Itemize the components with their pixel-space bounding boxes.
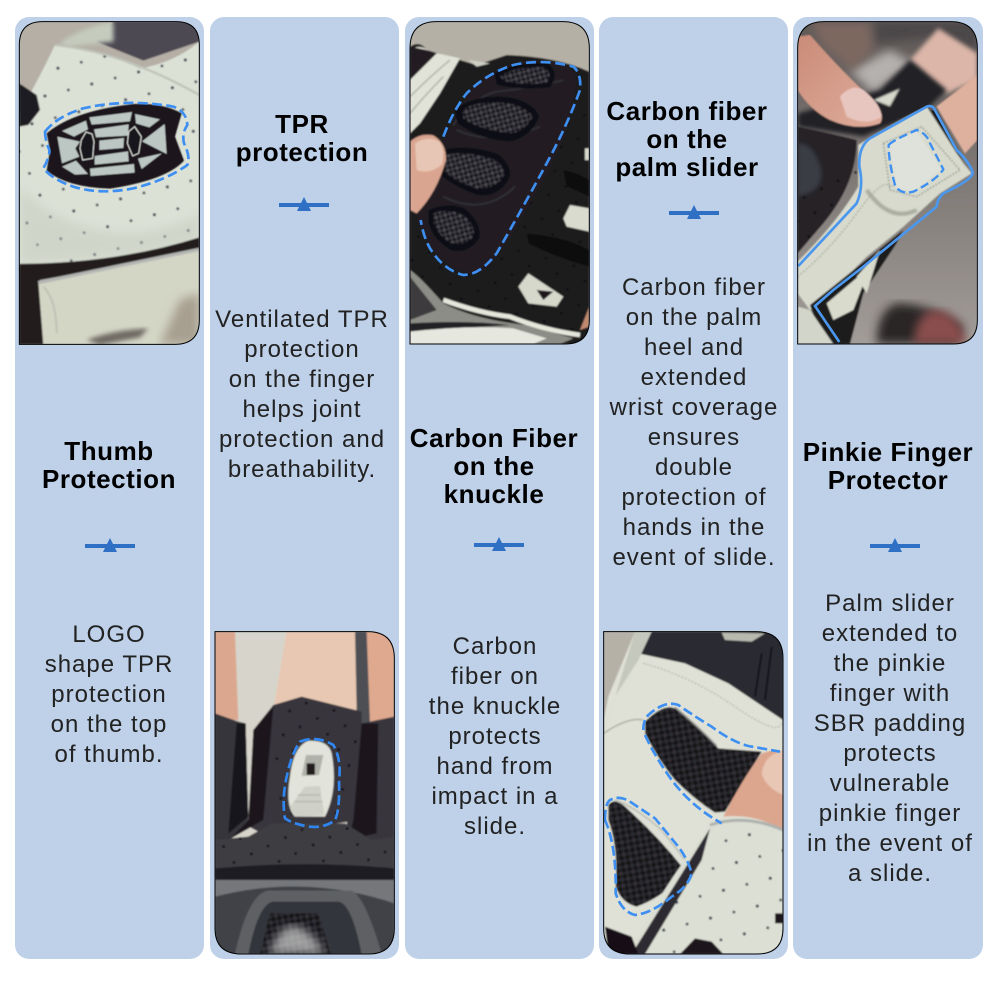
panel: TPR protection bbox=[210, 17, 399, 959]
text: TPR description: protection and bbox=[219, 426, 385, 453]
text: TPR description: protection bbox=[244, 336, 360, 363]
text: thumb description: shape TPR bbox=[45, 651, 173, 678]
text: thumb description: protection bbox=[51, 681, 167, 708]
panel: pinkie finger bbox=[793, 17, 983, 959]
photo: thumb logo TPR protector bbox=[18, 21, 200, 345]
heading: TPR protection: TPR bbox=[275, 109, 329, 139]
text: pinkie description: extended to bbox=[822, 620, 958, 647]
photo: carbon fiber knuckle bbox=[410, 21, 590, 344]
text: palm slider description: on the palm bbox=[626, 304, 762, 331]
text: knuckle description: hand from bbox=[436, 753, 554, 780]
photo: finger TPR protector bbox=[214, 631, 395, 954]
text: TPR description: Ventilated TPR bbox=[215, 306, 389, 333]
text: pinkie description: a slide. bbox=[848, 860, 932, 887]
text: palm slider description: double bbox=[655, 454, 733, 481]
panel: palm slider bbox=[599, 17, 788, 959]
divider icon bbox=[870, 538, 920, 552]
text: pinkie description: the pinkie bbox=[834, 650, 946, 677]
text: pinkie description: SBR padding bbox=[814, 710, 966, 737]
text: knuckle description: protects bbox=[448, 723, 542, 750]
text: knuckle description: the knuckle bbox=[429, 693, 561, 720]
text: palm slider description: Carbon fiber bbox=[622, 274, 766, 301]
text: palm slider description: ensures bbox=[648, 424, 740, 451]
text: knuckle description: impact in a bbox=[431, 783, 559, 810]
text: palm slider description: extended bbox=[641, 364, 747, 391]
text: knuckle description: fiber on bbox=[451, 663, 539, 690]
text: palm slider description: protection of bbox=[621, 484, 767, 511]
text: knuckle description: Carbon bbox=[453, 633, 537, 660]
panel: thumb protection bbox=[15, 17, 204, 959]
heading: Carbon Fiber on the knuckle: on the bbox=[453, 451, 535, 481]
photo: carbon palm slider bbox=[603, 631, 784, 954]
text: TPR description: breathability. bbox=[228, 456, 376, 483]
heading: Carbon fiber on the palm slider: Carbon fiber bbox=[606, 96, 768, 126]
heading: Carbon fiber on the palm slider: palm slider bbox=[615, 152, 759, 182]
heading: Carbon fiber on the palm slider bbox=[606, 96, 768, 182]
text: TPR description bbox=[215, 306, 389, 483]
text: thumb description: of thumb. bbox=[54, 741, 164, 768]
divider icon bbox=[85, 538, 135, 552]
panel: carbon fiber knuckle bbox=[405, 17, 594, 959]
icon: logo-shape protector bbox=[47, 104, 184, 189]
text: TPR description: on the finger bbox=[229, 366, 375, 393]
text: thumb description bbox=[45, 621, 173, 768]
text: pinkie description: vulnerable bbox=[830, 770, 950, 797]
photo: pinkie finger protector bbox=[797, 21, 978, 344]
heading: Carbon Fiber on the knuckle bbox=[410, 423, 578, 509]
text: palm slider description: hands in the bbox=[623, 514, 765, 541]
divider icon bbox=[279, 197, 329, 211]
heading: Thumb Protection: Protection bbox=[42, 464, 176, 494]
text: pinkie description: pinkie finger bbox=[819, 800, 961, 827]
text: thumb description: on the top bbox=[51, 711, 167, 738]
heading: Pinkie Finger Protector bbox=[803, 437, 973, 495]
divider icon bbox=[474, 537, 524, 551]
text: pinkie description: finger with bbox=[830, 680, 950, 707]
text: knuckle description bbox=[429, 633, 561, 840]
text: pinkie description bbox=[807, 590, 973, 887]
heading: Carbon Fiber on the knuckle: knuckle bbox=[444, 479, 544, 509]
heading: Pinkie Finger Protector: Pinkie Finger bbox=[803, 437, 973, 467]
heading: Thumb Protection bbox=[42, 436, 176, 494]
heading: Carbon Fiber on the knuckle: Carbon Fiber bbox=[410, 423, 578, 453]
text: palm slider description bbox=[610, 274, 778, 571]
text: palm slider description: heel and bbox=[644, 334, 744, 361]
text: pinkie description: Palm slider bbox=[825, 590, 955, 617]
heading: TPR protection: protection bbox=[236, 137, 368, 167]
text: knuckle description: slide. bbox=[464, 813, 526, 840]
text: pinkie description: protects bbox=[843, 740, 937, 767]
text: pinkie description: in the event of bbox=[807, 830, 973, 857]
heading: Pinkie Finger Protector: Protector bbox=[828, 465, 948, 495]
divider icon bbox=[669, 205, 719, 219]
heading: TPR protection bbox=[236, 109, 368, 167]
heading: Carbon fiber on the palm slider: on the bbox=[646, 124, 728, 154]
heading: Thumb Protection: Thumb bbox=[64, 436, 154, 466]
text: palm slider description: wrist coverage bbox=[610, 394, 778, 421]
text: TPR description: helps joint bbox=[242, 396, 362, 423]
text: palm slider description: event of slide. bbox=[612, 544, 776, 571]
text: thumb description: LOGO bbox=[72, 621, 146, 648]
